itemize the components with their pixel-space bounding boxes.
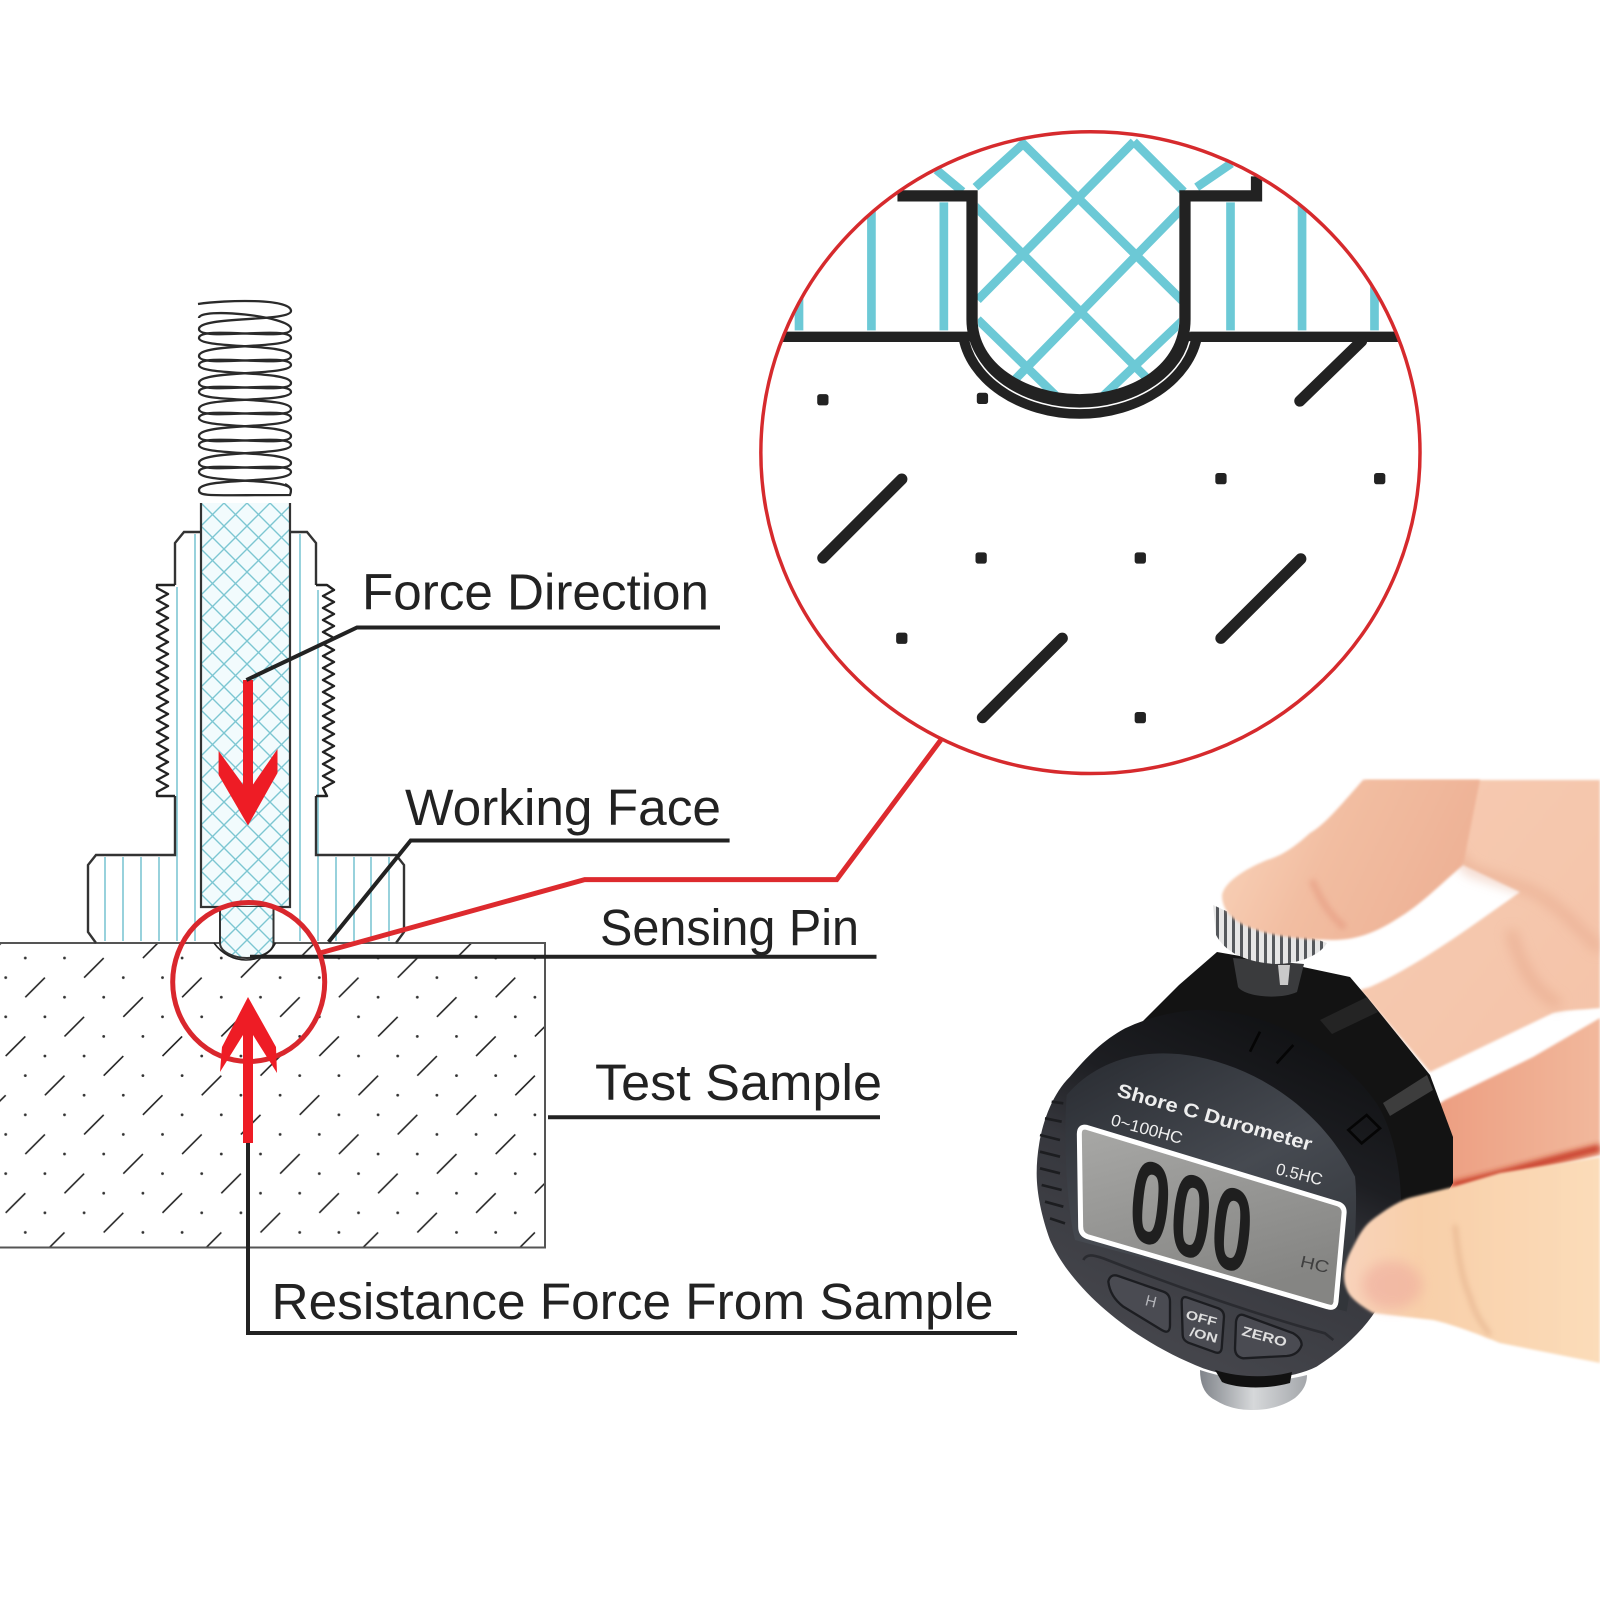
durometer back body [1124,952,1453,1300]
title: Shore C Durometer: Shore C Durometer [1115,1081,1315,1156]
magnifier red circle small [173,902,325,1062]
magnified detail view [761,132,1420,774]
palm and second finger [1360,780,1600,1072]
spring [198,301,291,495]
button OFF/ON: /ON [1188,1325,1219,1346]
label: Test Sample: Test Sample [595,1054,882,1111]
bezel [1037,1010,1401,1378]
leader: sensing pin [250,955,876,959]
button ZERO [1235,1315,1302,1358]
sensing pin rod [201,503,290,907]
bezel notches [1250,1032,1380,1143]
knob stem [1233,958,1304,997]
label: Resistance Force From Sample: Resistance Force From Sample [272,1273,994,1330]
range label: 0~100HC [1109,1111,1185,1148]
thumb crease [1455,1225,1490,1335]
indenter cross-section [88,301,404,958]
test sample block [0,943,545,1248]
red reflection shadow [1452,1148,1600,1186]
knurled knob [1213,905,1327,964]
third finger [1430,1018,1600,1195]
top finger [1222,780,1480,940]
leader: resistance force [248,1143,1017,1333]
label: Sensing Pin: Sensing Pin [600,899,859,956]
magnifier circle outline [761,132,1420,774]
magnified housing hatch [799,202,1374,330]
red arrow: force direction [219,680,278,826]
plunger neck [1215,1370,1292,1387]
magnified cross hatch [923,142,1231,402]
button OFF/ON [1182,1297,1224,1353]
label: Working Face: Working Face [405,779,721,836]
LCD screen [1079,1127,1344,1307]
indentation outline [214,943,276,960]
magnified pin outline [897,176,1257,400]
front panel [1065,1053,1356,1312]
magnified sample dots [817,393,1385,723]
infographic canvas [0,130,1600,1410]
magnified sample slashes [823,341,1361,718]
sensing pin tip [220,907,274,958]
label: Force Direction: Force Direction [362,564,709,620]
leader: test sample [548,1115,880,1119]
resolution label: 0.5HC [1274,1159,1325,1189]
button panel outline [1083,1255,1333,1340]
leader: working face [329,840,730,942]
leader: force direction [246,628,720,680]
finger shading [1430,810,1600,1005]
red connector line to magnified view [320,740,941,953]
stem chrome highlight [1278,965,1290,985]
durometer face [1037,1010,1401,1378]
photo: hand holding durometer [1037,780,1600,1410]
left thread [157,585,175,796]
red arrow: resistance force [220,997,277,1143]
indentation gap [970,341,1190,408]
magnified surface indentation [968,332,1192,408]
button H: H [1143,1292,1158,1312]
finger crease [1312,880,1345,928]
button ZERO: ZERO [1240,1323,1289,1350]
thumb [1344,1157,1600,1363]
digits readout: 000 [1124,1133,1260,1301]
right thread [316,585,334,796]
thumb pink tip [1362,1261,1422,1309]
bezel grip ticks [1040,1102,1065,1223]
magnified surface line [783,332,1398,342]
button OFF/ON: OFF [1184,1308,1219,1330]
housing outline [88,532,404,943]
button H [1108,1275,1170,1332]
unit label: HC [1298,1252,1331,1277]
vertical hatch lines of housing [105,534,389,941]
bottom plunger [1200,1370,1307,1410]
body highlight [1383,1075,1433,1116]
shoulder highlight [1320,997,1378,1034]
